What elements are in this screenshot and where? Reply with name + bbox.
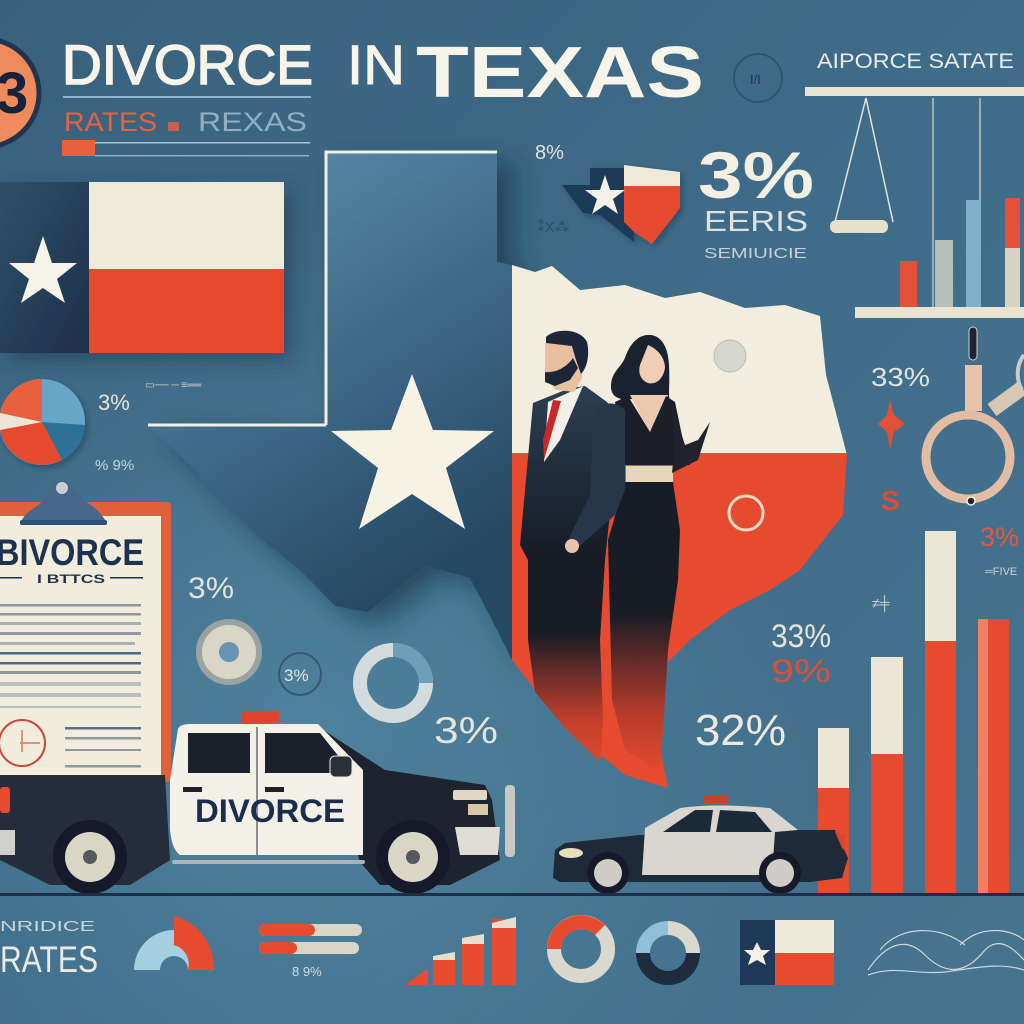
woman [565,335,710,772]
decorative line icon [868,930,1024,975]
subtitle: rates: RATES [64,107,157,137]
clipboard document: I BTTCS [37,572,105,586]
pill bars: 8 9% [292,964,322,979]
couple [520,331,710,772]
small labels left: % 9% [95,457,134,474]
gauges and percentages bottom left: 3% [284,666,309,685]
donut charts [554,922,693,978]
pie chart [0,379,85,465]
percent labels center right: 32% [695,706,786,755]
badge: number 3 [0,39,39,147]
mini texas and 3 percent: ⁑X⁂ [537,218,570,236]
percent labels center right [695,618,831,755]
small labels left: 3% [98,390,130,415]
top right label: I/I [750,72,761,87]
map: blue west part [148,152,512,660]
scales and bars chart [805,87,1024,318]
mini texas and 3 percent: SEMIUICIE [704,245,807,262]
map: flag east part [512,260,852,793]
bottom label: rates: NRIDICE [0,918,95,935]
bottom label: rates [0,918,98,980]
percent labels center right: 33% [771,618,831,654]
half gauge [134,916,214,970]
right bar chart [818,531,1009,894]
mini texas and 3 percent: 3% [698,138,814,212]
gauges and percentages bottom left [188,572,498,751]
truck cab [170,724,363,855]
right percentages and handcuffs [871,327,1024,613]
man [520,331,620,762]
percent labels center right: 9% [771,653,831,689]
small labels left [95,380,202,474]
subtitle: rates: REXAS [198,107,307,137]
right percentages and handcuffs: 33% [871,362,930,392]
right percentages and handcuffs: S [881,485,900,516]
pill bars [259,924,362,979]
title: IN [347,33,405,96]
title: DIVORCE [62,33,313,96]
truck bed [0,775,170,885]
top right label [734,50,1014,102]
ground line [0,893,1024,896]
police car [553,795,848,894]
rising bars [405,917,516,985]
clipboard document [0,480,171,782]
small labels left: ▭── ─ ≡══ [145,380,202,391]
top right label: AIPORCE SATATE [817,50,1014,73]
bottom label: rates: RATES [0,939,98,980]
gauges and percentages bottom left: 3% [434,710,498,751]
right percentages and handcuffs: ≠╪ [872,595,890,613]
clipboard clip [20,480,107,525]
right percentages and handcuffs: ═FIVE [984,566,1017,578]
police truck: DIVORCE [195,793,345,829]
right percentages and handcuffs: 3% [980,522,1019,552]
truck hood [320,728,500,885]
police truck [0,711,515,894]
subtitle: rates [62,96,311,156]
mini texas and 3 percent: EERIS [704,206,808,238]
texas map [148,152,852,793]
flag: left [0,182,284,353]
map: star [331,374,494,529]
mini texas and 3 percent: 8% [535,142,564,164]
title [62,33,704,113]
mini texas and 3 percent [535,138,814,262]
title: TEXAS [416,33,704,113]
clipboard document: BIVORCE [0,532,144,573]
bottom flag [740,920,834,985]
gauges and percentages bottom left: 3% [188,572,234,605]
